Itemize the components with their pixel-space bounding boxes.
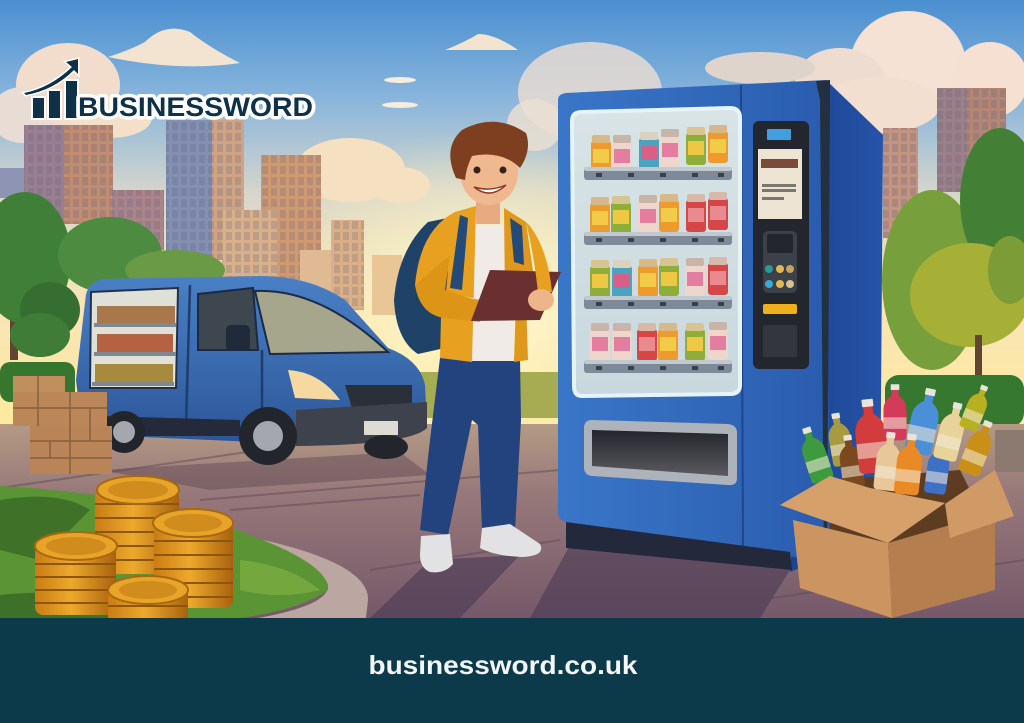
person shirt: [472, 225, 514, 361]
pickup tray: [584, 420, 737, 485]
van body: [76, 276, 427, 444]
person hand: [528, 289, 554, 311]
box front face: [793, 520, 892, 618]
bottles: [795, 382, 999, 496]
van mirror: [226, 325, 250, 351]
person jacket left: [415, 206, 480, 362]
coin stack right: [153, 509, 233, 608]
logo icon: rising bars and arrow: [24, 59, 78, 118]
clouds: [0, 11, 1024, 203]
coin stack left: [35, 532, 117, 615]
person clipboard: [471, 270, 561, 321]
pavement shadows and seams: [0, 430, 1024, 618]
vending machine: [558, 80, 883, 572]
background scene: sky: [0, 0, 1024, 470]
person backpack strap: [450, 215, 524, 290]
person jacket right: [504, 208, 536, 362]
logo: [24, 59, 313, 122]
machine side panel: [790, 80, 883, 572]
grass and kerb: [0, 486, 368, 618]
panel card slot: [763, 325, 797, 357]
cardboard boxes by van: [13, 376, 112, 474]
box interior: [830, 470, 990, 560]
footer band: [0, 618, 1024, 723]
van far wheel: [364, 435, 408, 459]
trees: [0, 128, 1024, 427]
person jeans: [420, 358, 521, 535]
panel status display: [767, 129, 791, 140]
van grille and bumper: [345, 385, 412, 408]
shelf row 4: [584, 322, 732, 373]
van door seam: [186, 285, 262, 425]
footer url: businessword.co.uk: [368, 650, 638, 680]
shelf row 2: [584, 192, 732, 245]
person shoes: [420, 524, 541, 572]
box right flap: [945, 470, 1014, 538]
person backpack: [394, 215, 462, 354]
glass display window: [572, 108, 740, 396]
van rear wheel: [103, 411, 145, 453]
panel keypad: [763, 231, 797, 293]
skyline buildings: [0, 88, 1006, 315]
machine base: [566, 522, 792, 570]
panel yellow button: [763, 304, 797, 314]
shelf row 1: [584, 125, 732, 180]
person head: [450, 122, 528, 224]
shelf row 3: [584, 257, 732, 309]
van windscreen: [255, 291, 388, 354]
van headlight: [288, 370, 340, 400]
delivery van: [76, 276, 427, 465]
person right arm sleeve: [526, 222, 552, 292]
machine front: [558, 80, 830, 565]
van cargo shelves: [90, 288, 178, 388]
logo wordmark: BUSINESSWORD: [78, 92, 313, 122]
panel screen: [758, 149, 802, 219]
control panel: [753, 121, 809, 369]
coin stack front: [108, 576, 188, 618]
box right face: [888, 512, 995, 618]
pavement ground: [0, 424, 1024, 618]
box left flap: [780, 476, 945, 543]
coin stacks: [35, 476, 233, 618]
coin stack back: [95, 476, 179, 574]
van front wheel: [239, 407, 297, 465]
van side window: [198, 288, 258, 350]
student person: [394, 122, 561, 572]
cardboard box of bottles: [780, 382, 1014, 618]
